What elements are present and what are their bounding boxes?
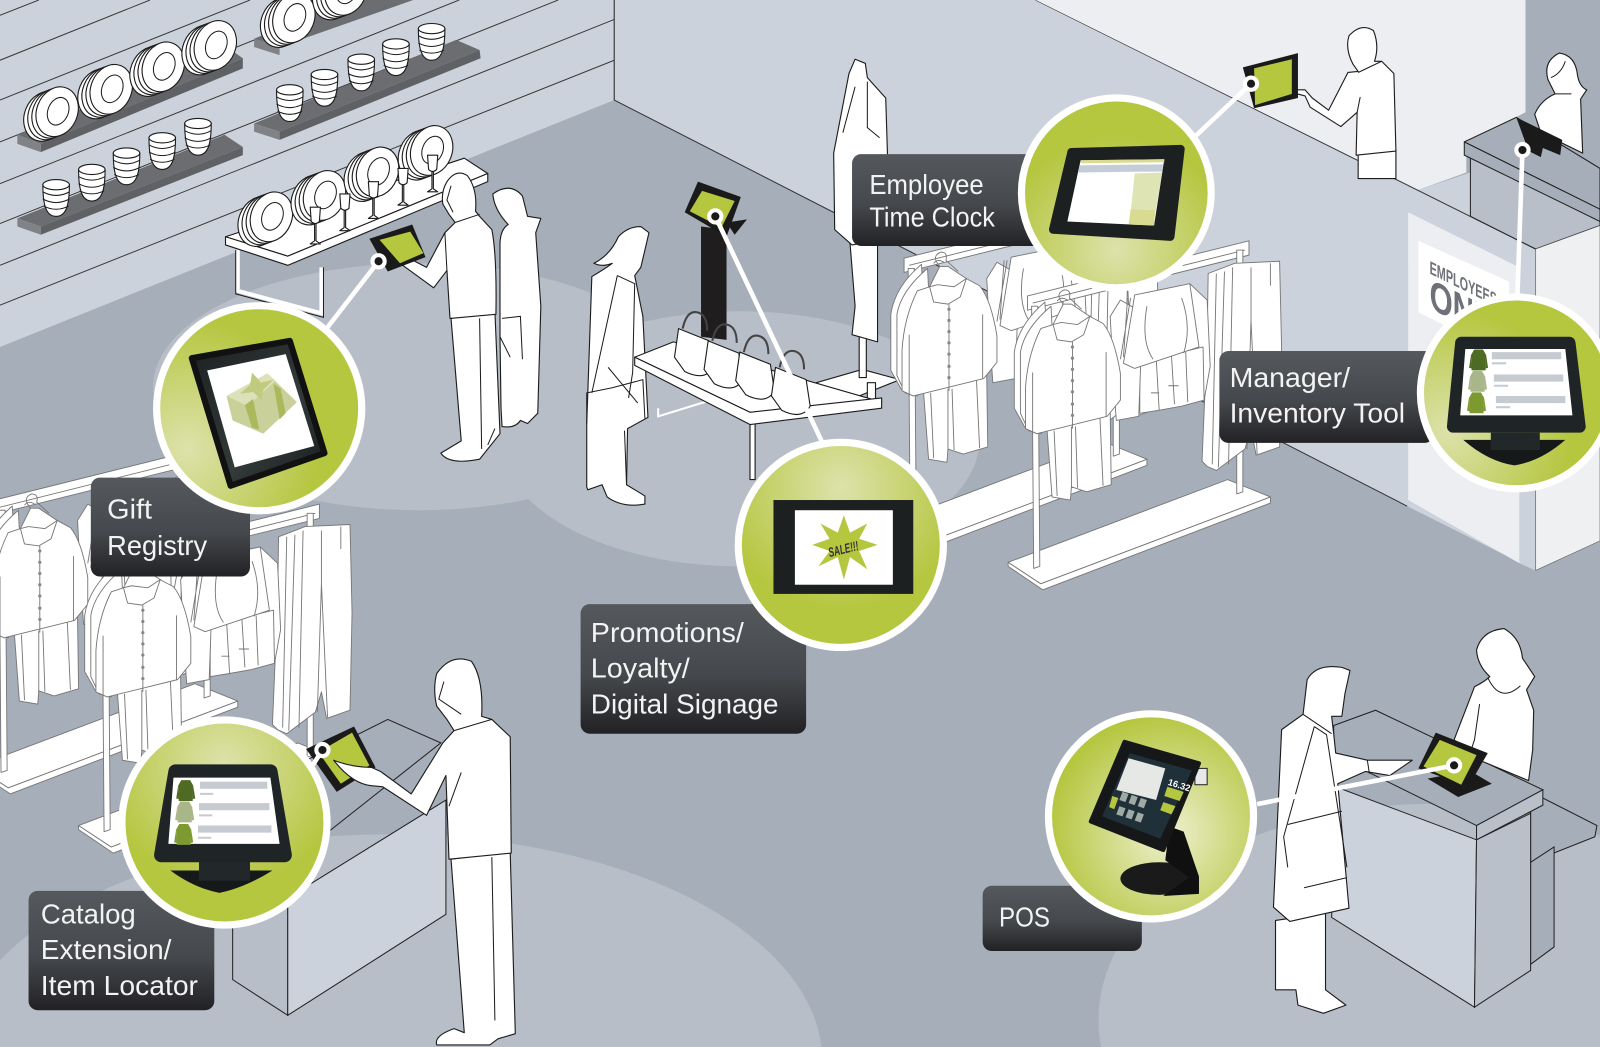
woman standing behind xyxy=(493,188,541,427)
clothes rack centre rear xyxy=(885,203,1158,552)
wall shelf: plates xyxy=(16,14,244,152)
target dots xyxy=(316,78,1529,771)
callout circle: POS terminal xyxy=(1048,714,1254,919)
wall shelf: bowls xyxy=(17,118,243,235)
man with tablet xyxy=(400,173,500,461)
label: Promotions/Loyalty/Digital Signage xyxy=(581,604,806,734)
mannequin xyxy=(816,59,900,400)
label: POS xyxy=(983,886,1142,951)
customer at catalog tablet xyxy=(334,659,515,1045)
upper shelf: plates xyxy=(253,0,413,55)
label: POS: POS xyxy=(999,902,1050,933)
POS tablet xyxy=(1418,733,1492,797)
label: Promotions/Loyalty/Digital Signage: Loyalty/ xyxy=(591,653,690,684)
label: Catalog Extension/Item Locator: Extension/ xyxy=(41,934,172,965)
customer at POS xyxy=(1273,667,1412,1013)
catalog tablet xyxy=(306,727,376,792)
label: Gift Registry: Registry xyxy=(107,530,207,561)
gift registry tablet xyxy=(369,225,426,271)
label: Catalog Extension/Item Locator: Item Locator xyxy=(41,970,198,1001)
clothes rack left rear xyxy=(0,445,249,794)
label: Catalog Extension/Item Locator: Catalog xyxy=(41,898,136,930)
label: Promotions/Loyalty/Digital Signage: Digital Signage xyxy=(591,688,779,719)
receptionist xyxy=(1535,53,1587,153)
label: Gift Registry: Gift xyxy=(107,493,152,524)
floor light pools xyxy=(0,263,1600,1047)
connector lines xyxy=(306,84,1522,804)
woman with shoulder bag xyxy=(587,227,649,505)
reception desk xyxy=(1464,117,1600,249)
callout circle: catalog xyxy=(122,720,327,925)
employees only wall panel: EMPLOYEES xyxy=(1430,257,1497,311)
callout circle: employee time clock xyxy=(1021,98,1211,288)
label: Manager/Inventory Tool xyxy=(1219,351,1434,443)
label: Catalog Extension/Item Locator xyxy=(29,891,214,1010)
callout circle: gift registry xyxy=(157,306,362,511)
employee figure at wall tablet xyxy=(1282,28,1396,179)
label: Manager/Inventory Tool: Manager/ xyxy=(1230,362,1350,393)
centre table with bags xyxy=(635,312,882,480)
label: Promotions/Loyalty/Digital Signage: Promotions/ xyxy=(591,617,744,648)
wall stripes xyxy=(0,0,614,305)
display table with plates and glasses xyxy=(226,119,488,317)
back wall xyxy=(614,0,1536,570)
employees only wall panel: ONLY xyxy=(1430,269,1509,356)
clothes rack left front xyxy=(79,504,352,853)
wall tablet xyxy=(1243,53,1298,108)
label: Employee Time Clock: Employee xyxy=(869,169,984,200)
clothes rack centre front xyxy=(1008,241,1282,590)
POS counter xyxy=(1332,710,1597,1007)
raised room wall xyxy=(1036,0,1526,190)
label: Manager/Inventory Tool: Inventory Tool xyxy=(1230,397,1405,428)
label: Employee Time Clock: Time Clock xyxy=(869,202,995,233)
callout circle: POS terminal: 16.32 xyxy=(1167,777,1192,793)
upper shelf: bowls xyxy=(254,24,481,140)
left wall xyxy=(0,0,614,347)
kiosk stand and tablet xyxy=(685,182,747,340)
label: Gift Registry xyxy=(91,478,250,577)
cashier xyxy=(1454,629,1535,781)
employees only wall panel xyxy=(1408,212,1600,570)
callout circle: promotions xyxy=(738,442,943,647)
callout circle: promotions: SALE!!! xyxy=(827,538,860,560)
label: Employee Time Clock xyxy=(852,154,1046,246)
callout circle: manager/inventory tool xyxy=(1420,297,1600,489)
catalog counter xyxy=(233,719,446,1015)
